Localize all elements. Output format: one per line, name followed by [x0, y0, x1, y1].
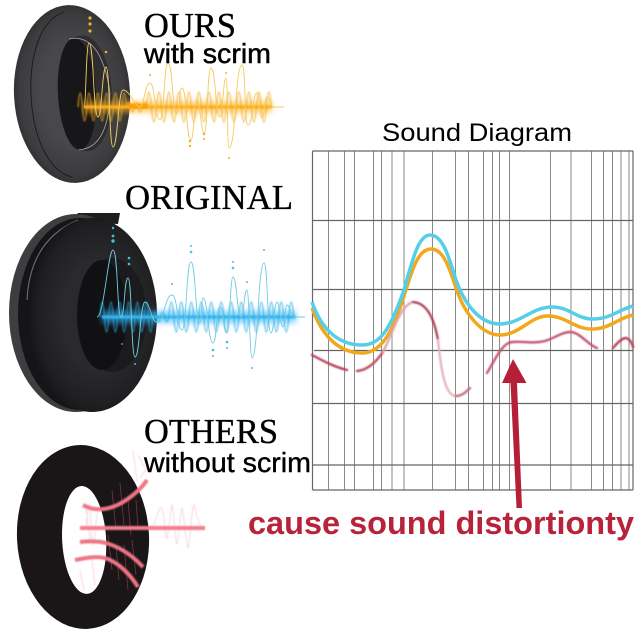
heading: Sound Diagram: Sound Diagram: [382, 119, 572, 147]
arrow: red pointer to distortion: [502, 359, 526, 508]
heading: OURS: OURS: [144, 6, 236, 45]
panel: original earpad with blue sound wave: [9, 213, 305, 412]
sound wave: blue: [97, 227, 305, 369]
heading: OTHERS: OTHERS: [144, 412, 278, 451]
icon: others earpad: [12, 442, 154, 632]
chart grid: [312, 151, 633, 490]
callout: cause sound distortionty: cause sound distortionty: [248, 505, 634, 541]
icon: ours earpad: [9, 2, 135, 186]
text: without scrim: without scrim: [143, 447, 311, 478]
curve: original (cyan): [312, 235, 633, 345]
panel: others earpad with red distorted wave: [12, 442, 205, 632]
heading: ORIGINAL: ORIGINAL: [125, 178, 293, 217]
curve: ours (orange): [312, 249, 633, 353]
text: with scrim: with scrim: [143, 38, 271, 69]
chart: sound diagram: [312, 151, 633, 508]
sound wave: orange: [78, 16, 284, 159]
panel: ours earpad with orange sound wave: [9, 2, 284, 186]
icon: original earpad on headphone: [9, 213, 157, 412]
sound wave: red scattered: [75, 450, 205, 590]
curve: others (red, broken): [312, 302, 633, 396]
